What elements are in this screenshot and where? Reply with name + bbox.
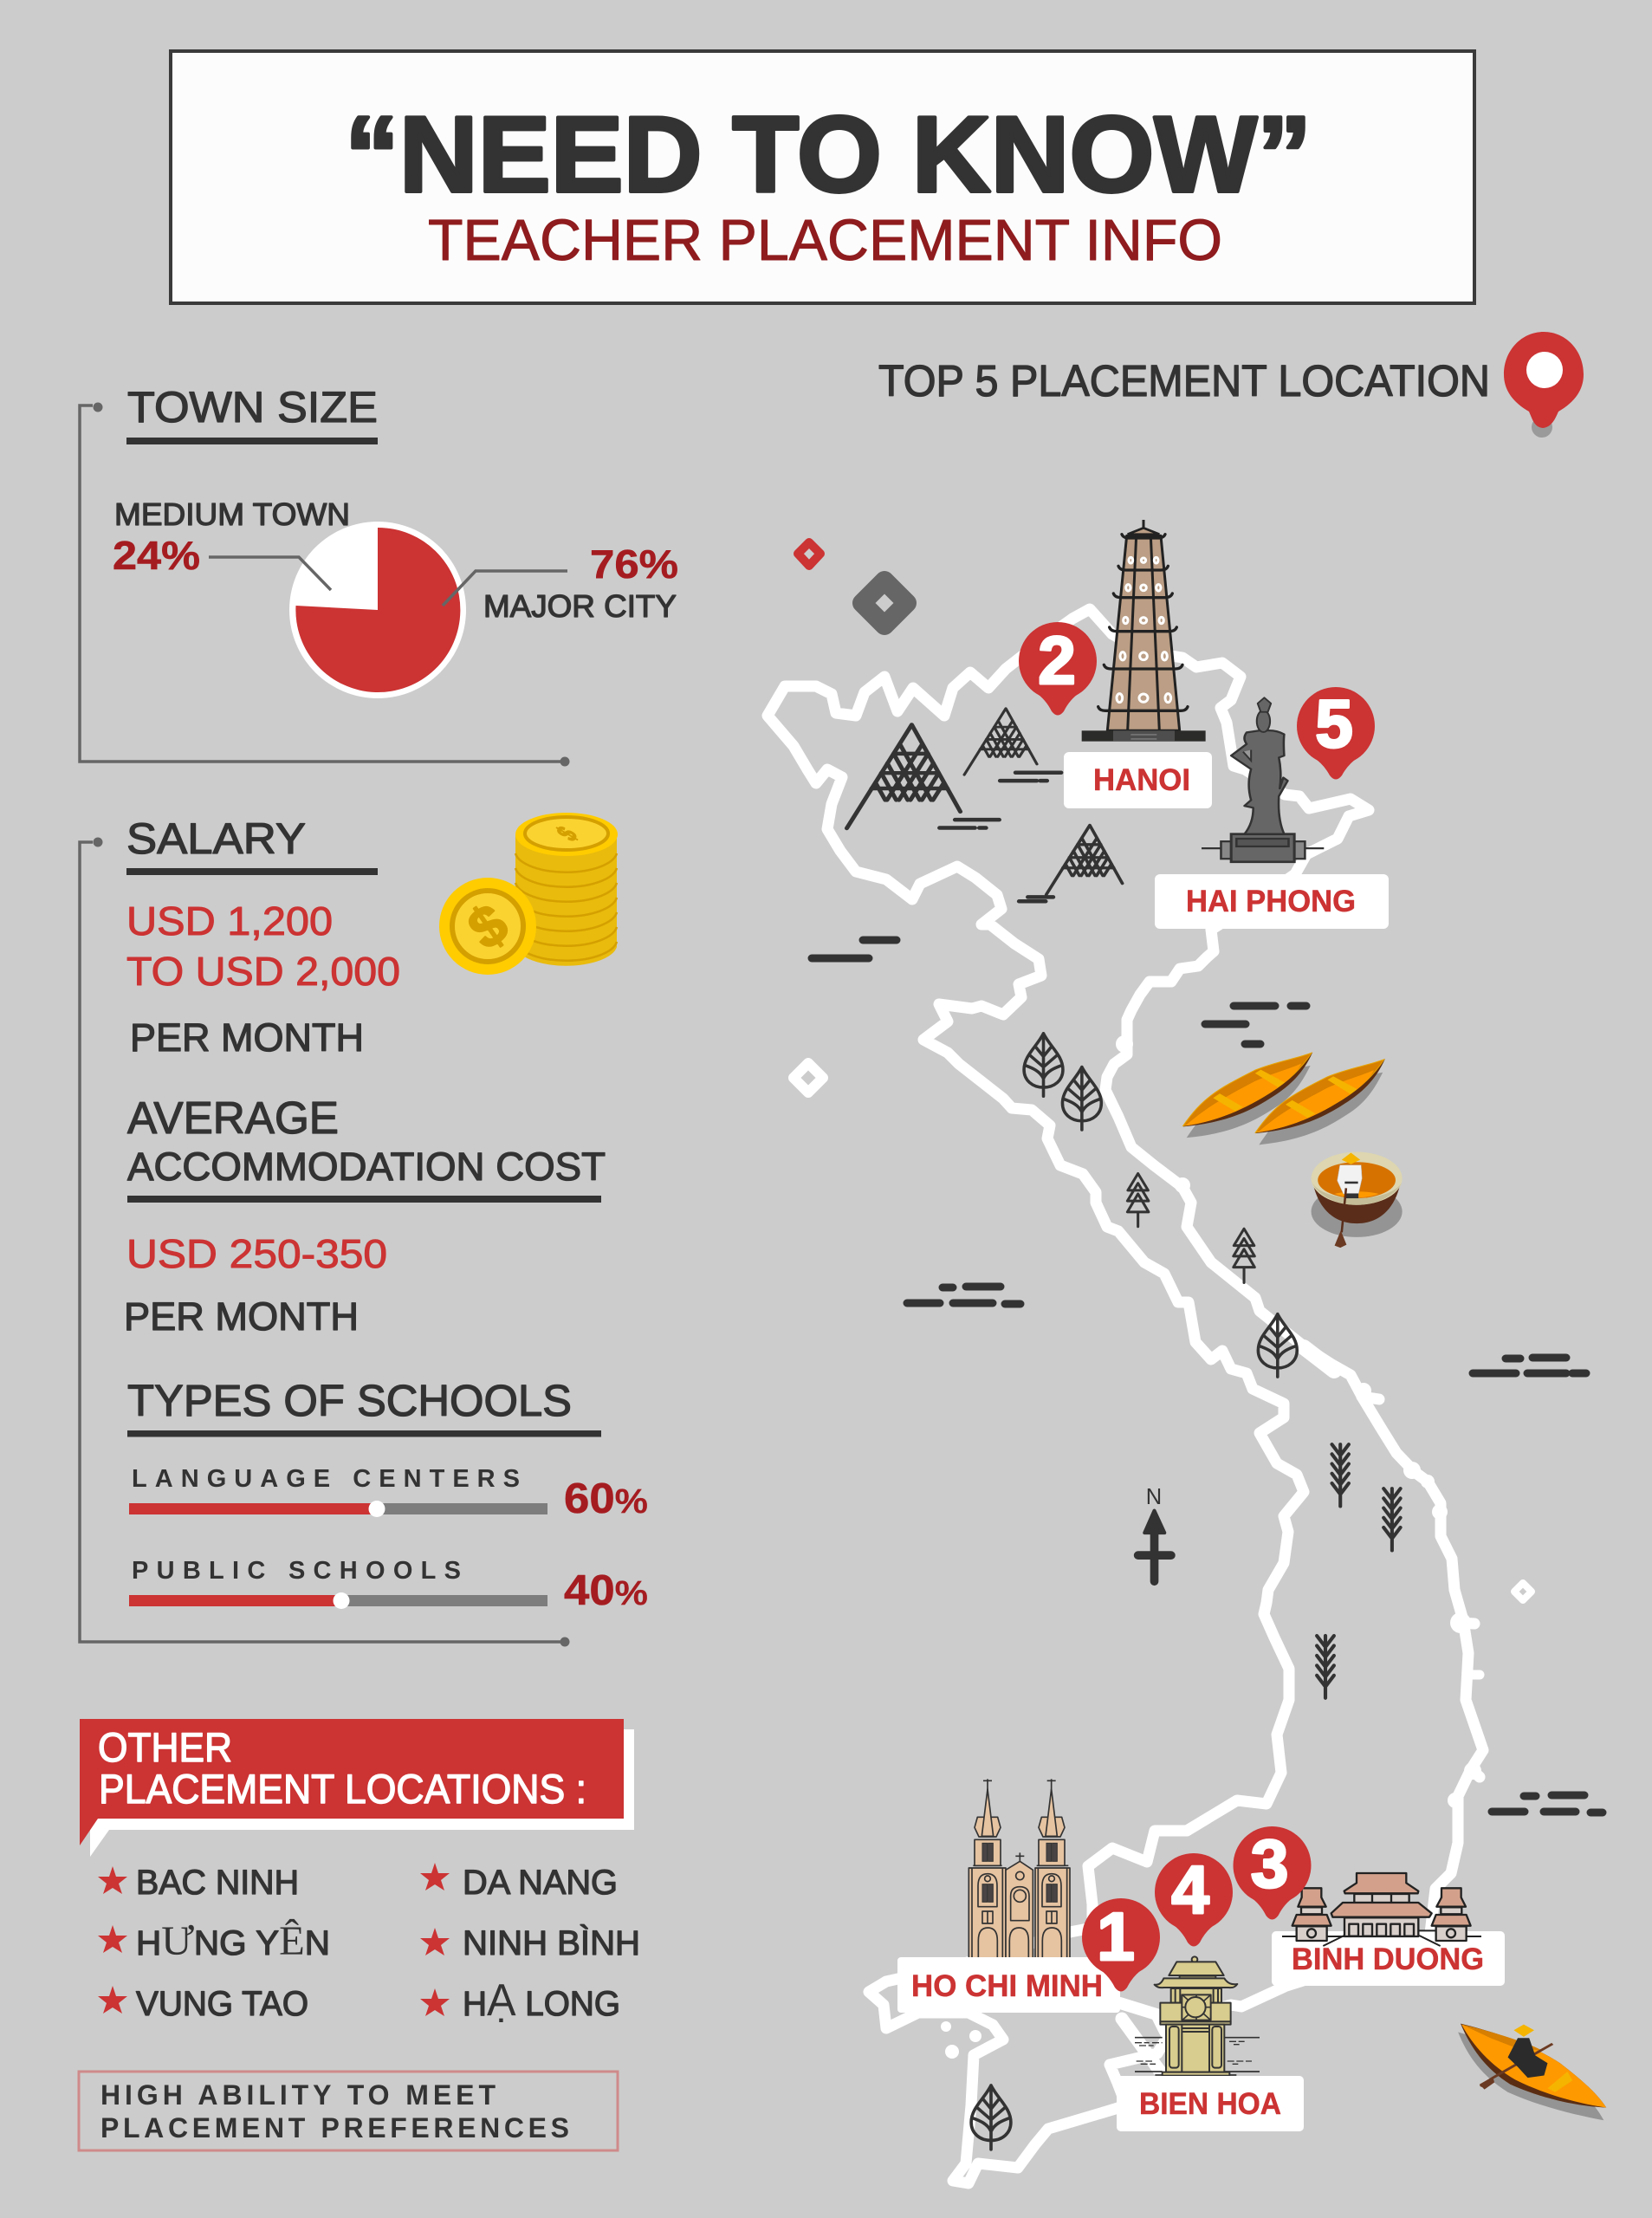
mountains xyxy=(847,709,1123,901)
icon: pine tree xyxy=(1234,1229,1254,1282)
pin 3: 3 xyxy=(1251,1826,1288,1902)
icon: pine tree xyxy=(1127,1173,1149,1227)
label: Bien Hoa: BIEN HOA xyxy=(1139,2087,1281,2121)
label: Binh Duong xyxy=(1272,1931,1505,1986)
banner: other placement locations xyxy=(80,1719,634,1857)
header panel xyxy=(171,51,1474,303)
salary value xyxy=(126,898,400,994)
icon: boat with rower xyxy=(1458,2024,1606,2120)
icon: coins xyxy=(439,813,618,975)
heading: average accommodation cost: AVERAGE xyxy=(127,1093,339,1144)
bar: public schools: 40% xyxy=(564,1567,648,1614)
pie chart xyxy=(289,522,466,698)
bar: public schools: PUBLIC SCHOOLS xyxy=(132,1557,461,1585)
icon: Hai Phong statue xyxy=(1202,697,1324,862)
icon: coracle with rower xyxy=(1312,1152,1403,1248)
bar: language centers xyxy=(129,1465,648,1522)
value: 24%: 24% xyxy=(113,533,200,578)
subtitle: TEACHER PLACEMENT INFO xyxy=(428,208,1222,273)
list: other locations: NINH BÌNH xyxy=(463,1923,640,1962)
label: per month: PER MONTH xyxy=(130,1015,364,1060)
label: Hanoi: HANOI xyxy=(1093,763,1190,797)
title: “NEED TO KNOW” xyxy=(345,95,1312,215)
callout: high ability: PLACEMENT PREFERENCES xyxy=(100,2112,569,2143)
icon: Ho Chi Minh cathedral xyxy=(969,1779,1070,1958)
icon: Binh Duong temple xyxy=(1282,1873,1481,1946)
pin 1: 1 xyxy=(1097,1898,1135,1975)
label: Hai Phong: HAI PHONG xyxy=(1186,885,1356,918)
leader lines xyxy=(209,557,567,606)
heading: salary: SALARY xyxy=(126,814,306,863)
list: other locations xyxy=(98,1863,640,2026)
list: other locations: DA NANG xyxy=(463,1864,618,1902)
label: Ho Chi Minh: HO CHI MINH xyxy=(911,1969,1103,2003)
callout: high ability xyxy=(79,2072,618,2150)
list: other locations: HẠ LONG xyxy=(463,1975,620,2026)
banner: other placement locations: OTHER xyxy=(98,1724,232,1770)
value: 76%: 76% xyxy=(590,542,678,587)
icon: north arrow: N xyxy=(1146,1485,1162,1509)
label: Hai Phong xyxy=(1155,874,1389,929)
list: other locations: HƯNG YÊN xyxy=(136,1918,330,1964)
icon: boats xyxy=(1183,1053,1385,1145)
label: major city: MAJOR CITY xyxy=(483,588,677,624)
salary value: TO USD 2,000 xyxy=(126,949,400,994)
pin 1 xyxy=(1082,1898,1160,1991)
list: other locations: VUNG TAO xyxy=(136,1985,308,2023)
icon: Bien Hoa clock tower xyxy=(1135,1956,1260,2076)
label: per month: PER MONTH xyxy=(124,1294,359,1339)
pin 4: 4 xyxy=(1171,1852,1209,1928)
cloud dashes xyxy=(812,940,1603,1813)
label: Hanoi xyxy=(1064,752,1212,808)
icon: north arrow xyxy=(1138,1485,1171,1581)
decorative diamonds xyxy=(794,542,1532,1600)
pin 3 xyxy=(1234,1826,1312,1920)
heading: town size: TOWN SIZE xyxy=(127,383,378,431)
icon: leaf tree south xyxy=(971,2085,1011,2150)
list: other locations: BAC NINH xyxy=(136,1864,299,1902)
salary value: USD 1,200 xyxy=(126,898,333,944)
icon: wheat south xyxy=(1317,1636,1334,1698)
panel: salary and schools xyxy=(80,813,648,1646)
callout: high ability: HIGH ABILITY TO MEET xyxy=(100,2079,496,2111)
map islands and coast blobs xyxy=(941,1035,1481,2059)
label: Ho Chi Minh xyxy=(897,1957,1120,2013)
pin 2: 2 xyxy=(1038,622,1076,698)
heading: types of schools: TYPES OF SCHOOLS xyxy=(127,1376,572,1425)
label: medium town: MEDIUM TOWN xyxy=(114,496,350,532)
bar: public schools xyxy=(129,1557,648,1614)
pin 2 xyxy=(1019,622,1097,716)
pin 5 xyxy=(1297,685,1375,780)
banner: other placement locations: PLACEMENT LOCATIONS : xyxy=(99,1766,586,1812)
pin 5: 5 xyxy=(1315,685,1353,762)
trees and plants xyxy=(1024,1034,1403,1581)
icon: leaf tree xyxy=(1062,1067,1101,1130)
TOP 5 heading: TOP 5 PLACEMENT LOCATION xyxy=(878,356,1490,405)
heading: average accommodation cost: ACCOMMODATION COST xyxy=(127,1145,606,1189)
label: Bien Hoa xyxy=(1117,2076,1304,2131)
bar: language centers: 60% xyxy=(564,1475,648,1522)
map of Vietnam outline xyxy=(768,609,1483,2183)
icon: coins: $ xyxy=(457,891,519,962)
icon: leaf tree xyxy=(1024,1034,1063,1096)
bar: language centers: LANGUAGE CENTERS xyxy=(132,1465,520,1493)
icon: wheat xyxy=(1332,1444,1349,1507)
pin 4 xyxy=(1155,1852,1233,1946)
accommodation value: USD 250-350 xyxy=(126,1231,387,1276)
heading: average accommodation cost xyxy=(127,1093,606,1203)
label: Binh Duong: BINH DUONG xyxy=(1292,1942,1484,1976)
panel: town size xyxy=(80,383,678,766)
icon: Hanoi pagoda tower xyxy=(1082,520,1206,742)
icon: leaf tree xyxy=(1258,1314,1297,1377)
icon: location pin xyxy=(1504,332,1584,438)
icon: coins: $ xyxy=(550,821,583,846)
icon: wheat xyxy=(1383,1488,1401,1551)
